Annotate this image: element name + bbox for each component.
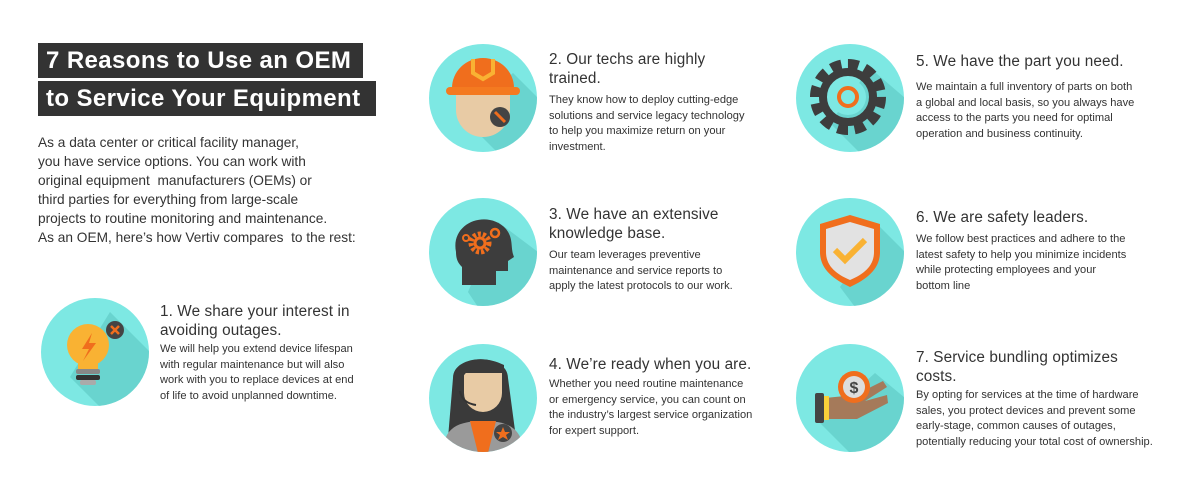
item 7: sales, you protect devices and prevent some <box>916 404 1136 416</box>
item 5: We maintain a full inventory of parts on both <box>916 81 1132 93</box>
item 2: investment. <box>549 140 606 152</box>
icon: support agent <box>429 344 537 452</box>
item 5: access to the parts you need for optimal <box>916 112 1113 124</box>
item 5 <box>916 53 1134 140</box>
item 1: of life to avoid unplanned downtime. <box>160 390 337 402</box>
item 1: with regular maintenance but will also <box>160 358 344 370</box>
intro text: As an OEM, here’s how Vertiv compares to the rest: <box>38 230 356 245</box>
intro text: you have service options. You can work with <box>38 154 306 169</box>
item 7: By opting for services at the time of hardware <box>916 389 1139 401</box>
item 7: early-stage, common causes of outages, <box>916 420 1116 432</box>
title: to Service Your Equipment <box>46 85 361 112</box>
item 2: to help you maximize return on your <box>549 125 725 137</box>
intro text: As a data center or critical facility manager, <box>38 135 299 150</box>
item 4: 4. We’re ready when you are. <box>549 356 751 373</box>
item 6: We follow best practices and adhere to the <box>916 233 1125 245</box>
title <box>38 43 376 116</box>
item 6: bottom line <box>916 280 970 292</box>
item 3: apply the latest protocols to our work. <box>549 280 733 292</box>
item 3: 3. We have an extensive <box>549 206 719 223</box>
item 1: We will help you extend device lifespan <box>160 343 353 355</box>
intro text: projects to routine monitoring and maintenance. <box>38 211 327 226</box>
icon: hand with coin: $ <box>850 380 859 397</box>
item 1: 1. We share your interest in <box>160 303 350 320</box>
icon: hard hat <box>429 44 537 152</box>
item 2: 2. Our techs are highly <box>549 51 705 68</box>
icon: head with gears <box>429 198 537 306</box>
item 2: They know how to deploy cutting-edge <box>549 94 738 106</box>
item 1: avoiding outages. <box>160 322 282 339</box>
item 1 <box>160 303 354 402</box>
intro text <box>38 135 356 245</box>
item 5: a global and local basis, so you always have <box>916 96 1134 108</box>
item 6: latest safety to help you minimize incidents <box>916 248 1126 260</box>
item 4: for expert support. <box>549 424 639 436</box>
title: 7 Reasons to Use an OEM <box>46 47 351 74</box>
icon: light bulb <box>41 298 149 406</box>
item 4: Whether you need routine maintenance <box>549 378 743 390</box>
icon: shield <box>796 198 904 306</box>
item 6: 6. We are safety leaders. <box>916 209 1088 226</box>
item 7: potentially reducing your total cost of ownership. <box>916 436 1153 448</box>
icon: hand with coin <box>796 344 904 452</box>
item 5: operation and business continuity. <box>916 128 1083 140</box>
intro text: original equipment manufacturers (OEMs) or <box>38 173 312 188</box>
item 5: 5. We have the part you need. <box>916 53 1124 70</box>
item 1: work with you to replace devices at end <box>160 374 354 386</box>
item 3: Our team leverages preventive <box>549 249 701 261</box>
item 6: while protecting employees and your <box>916 264 1096 276</box>
item 4: the industry’s largest service organization <box>549 409 752 421</box>
item 2 <box>549 51 744 152</box>
item 2: trained. <box>549 70 601 87</box>
item 4 <box>549 356 752 436</box>
item 7: costs. <box>916 368 957 385</box>
item 3 <box>549 206 733 292</box>
item 3: maintenance and service reports to <box>549 264 722 276</box>
item 2: solutions and service legacy technology <box>549 110 744 122</box>
item 7: 7. Service bundling optimizes <box>916 349 1118 366</box>
item 3: knowledge base. <box>549 225 665 242</box>
item 7 <box>916 349 1153 448</box>
intro text: third parties for everything from large-scale <box>38 192 298 207</box>
icon: gear <box>796 44 904 152</box>
item 6 <box>916 209 1126 292</box>
item 4: or emergency service, you can count on <box>549 394 746 406</box>
